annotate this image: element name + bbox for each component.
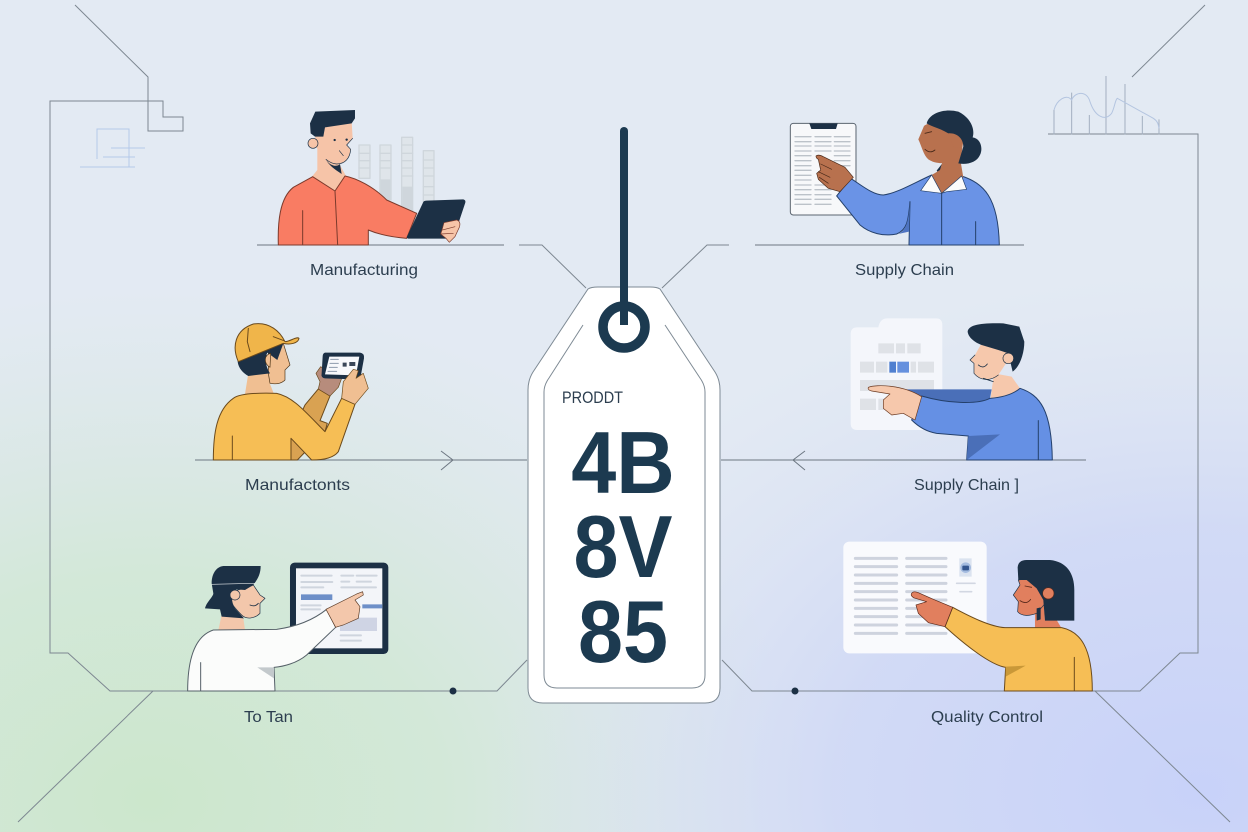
figure bbox=[188, 566, 363, 691]
label: Supply Chain ]: Supply Chain ] bbox=[914, 477, 1019, 494]
report sheet bbox=[843, 542, 987, 653]
clipboard bbox=[790, 123, 856, 215]
label: Manufacturing: Manufacturing bbox=[310, 262, 418, 279]
bar chart backdrop bbox=[359, 137, 434, 213]
document bbox=[851, 318, 942, 430]
label: Supply Chain: Supply Chain bbox=[855, 262, 954, 279]
node dot: right bbox=[792, 688, 798, 694]
tag code line 1: 4B bbox=[571, 413, 675, 512]
figure bbox=[911, 560, 1092, 691]
icon: line chart sketch bbox=[1054, 76, 1159, 134]
panel: supply chain person with document bbox=[851, 318, 1052, 460]
tag label: PRODDT bbox=[562, 389, 623, 407]
label: Quality Control: Quality Control bbox=[931, 709, 1043, 726]
tag inner outline bbox=[544, 325, 705, 688]
icon: floor plan sketch bbox=[80, 129, 145, 167]
panel: central product tag bbox=[528, 127, 720, 703]
panel: manufacturing person with tablet bbox=[278, 110, 465, 245]
tag ring bbox=[603, 306, 645, 348]
arrow: right row bbox=[793, 451, 805, 470]
wall screen bbox=[290, 563, 388, 654]
tag code line 2: 8V bbox=[573, 497, 673, 596]
label: Manufactonts: Manufactonts bbox=[245, 477, 350, 494]
cord cap bbox=[620, 127, 628, 135]
panel: worker in cap with tablet bbox=[213, 324, 368, 460]
figure bbox=[278, 110, 465, 245]
panel: person pointing at screen bbox=[188, 563, 388, 691]
panel: quality control person with document bbox=[843, 542, 1092, 691]
figure bbox=[816, 110, 999, 245]
row divider lines bbox=[195, 245, 1086, 460]
tag cord bbox=[620, 131, 628, 325]
tag body bbox=[528, 287, 720, 703]
arrow: left row bbox=[441, 451, 453, 470]
panel: supply chain person with clipboard bbox=[790, 110, 999, 245]
node dot: left bbox=[450, 688, 456, 694]
label: To Tan: To Tan bbox=[244, 709, 293, 726]
tag code line 3: 85 bbox=[578, 582, 668, 681]
figure bbox=[868, 323, 1052, 460]
